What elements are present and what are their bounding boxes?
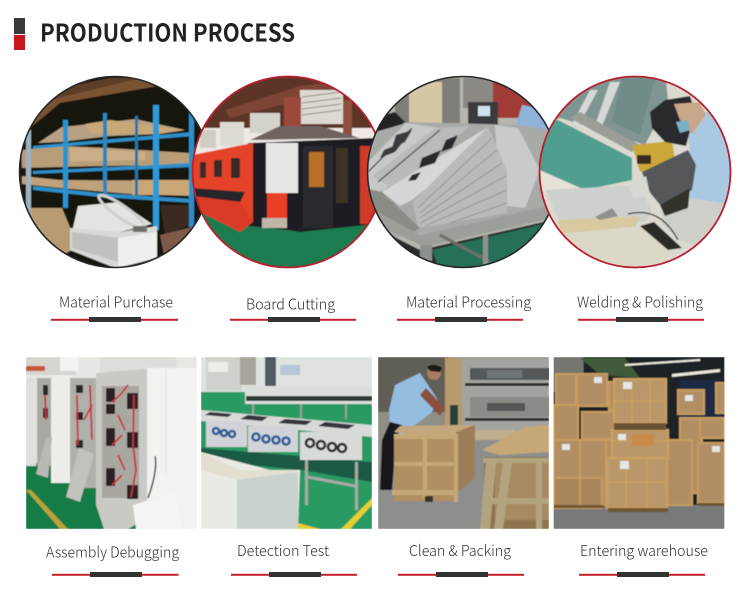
- photo: welder at work: [535, 72, 735, 272]
- step: material processing: [366, 76, 549, 322]
- photo: electrical cabinets: [26, 357, 197, 529]
- step: detection test: [201, 357, 372, 577]
- heading text: PRODUCTION PROCESS: [40, 14, 295, 50]
- photo: aluminium panels on table: [366, 76, 549, 268]
- photo: laser cutter: [192, 76, 376, 268]
- step label: Detection Test: [237, 540, 330, 561]
- step label: Board Cutting: [246, 294, 335, 314]
- step label: Clean & Packing: [409, 540, 511, 561]
- heading marker: [14, 18, 25, 50]
- step: clean and packing: [378, 357, 550, 577]
- divider: [51, 317, 178, 322]
- step label: Material Purchase: [59, 292, 173, 312]
- step: assembly debugging: [26, 357, 197, 577]
- step label: Welding & Polishing: [577, 292, 703, 312]
- heading: [14, 14, 295, 50]
- step label: Assembly Debugging: [46, 542, 179, 562]
- step: material purchase: [15, 72, 215, 322]
- photo: material racks: [18, 76, 202, 268]
- divider: [52, 572, 178, 577]
- step: board cutting: [190, 72, 390, 322]
- divider: [397, 317, 523, 322]
- divider: [578, 317, 704, 322]
- divider: [398, 572, 524, 577]
- step label: Material Processing: [406, 292, 531, 312]
- photo: worker packing crate: [378, 357, 550, 529]
- step: welding and polishing: [535, 72, 735, 322]
- photo: induction cookers under test: [201, 357, 372, 529]
- photo: stacked crates: [554, 357, 726, 529]
- divider: [231, 572, 357, 577]
- step label: Entering warehouse: [580, 540, 708, 561]
- step: entering warehouse: [554, 357, 726, 577]
- divider: [230, 317, 356, 322]
- divider: [579, 572, 705, 577]
